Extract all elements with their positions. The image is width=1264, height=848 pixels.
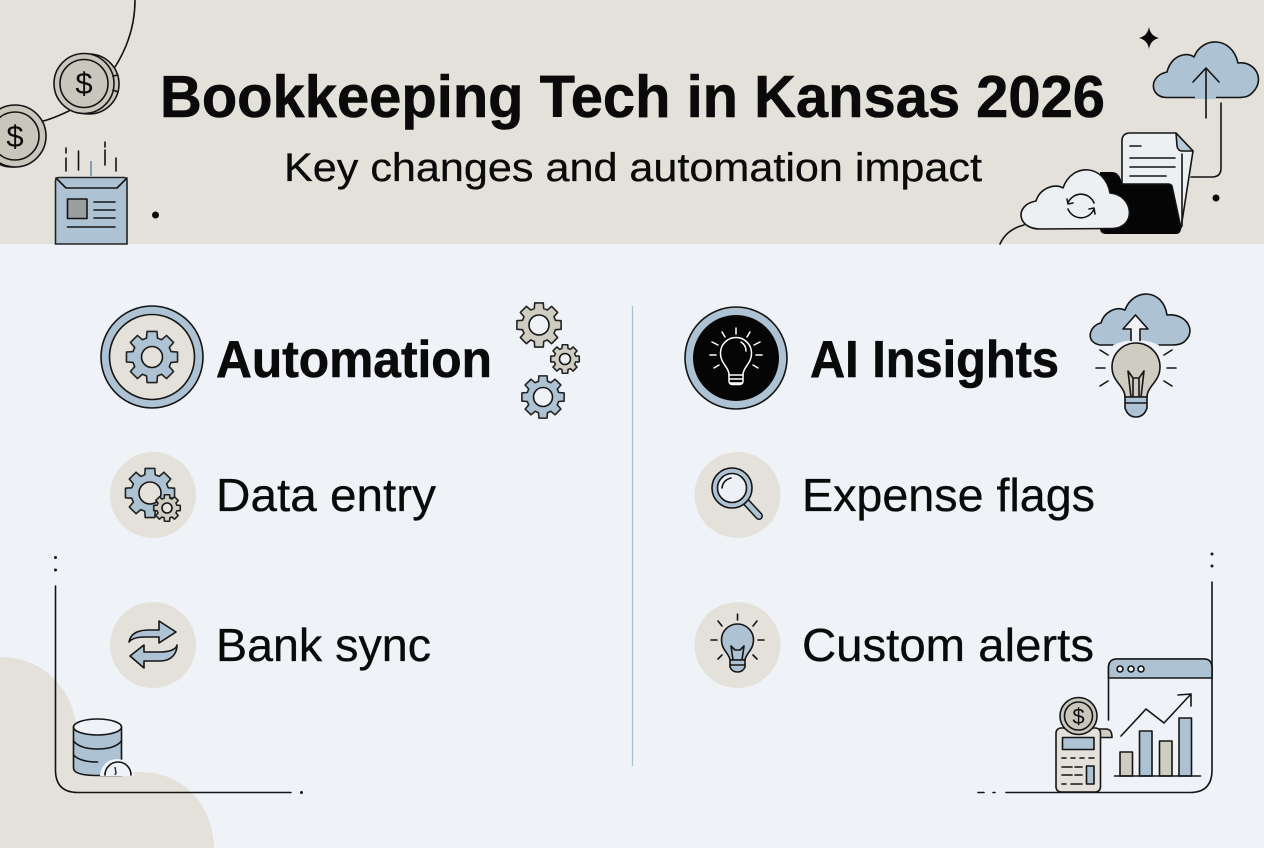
- heading: automation: Automation: [216, 331, 492, 389]
- icon: decorative gears: [517, 303, 579, 418]
- icon: small lightbulb: [694, 602, 780, 688]
- label: data entry: Data entry: [216, 469, 436, 521]
- icon: document envelope: [56, 142, 127, 244]
- icon: upload cloud: [1153, 42, 1258, 177]
- icon: bank sync arrows: [110, 602, 196, 688]
- icon: browser window with bar chart: [1108, 659, 1212, 776]
- dot left: [152, 212, 159, 218]
- icon: automation gear badge: [101, 306, 203, 408]
- bar chart: [1114, 718, 1200, 776]
- label: bank sync: Bank sync: [216, 619, 431, 671]
- dot right: [1212, 194, 1220, 202]
- icon: star: [1139, 27, 1159, 49]
- item: custom alerts: [694, 602, 1094, 688]
- item: expense flags: [694, 452, 1095, 538]
- header band: [0, 0, 1264, 244]
- icon: magnifier: [694, 452, 780, 538]
- icon: coins with connecting line: $: [75, 66, 93, 101]
- panel: ai insights: [685, 294, 1190, 688]
- title: Bookkeeping Tech in Kansas 2026: [160, 64, 1105, 130]
- icon: calculator with coin: $: [1072, 704, 1085, 729]
- icon: database with gauge: [74, 719, 134, 776]
- icon: folder with document: [1100, 133, 1193, 234]
- panel: automation: [101, 303, 579, 688]
- icon: coins with connecting line: $: [6, 119, 24, 154]
- icon: cloud and lightbulb: [1090, 294, 1190, 417]
- subtitle: Key changes and automation impact: [284, 146, 982, 190]
- icon: sync cloud: [1000, 170, 1129, 244]
- icon: calculator with coin: [1056, 698, 1112, 792]
- divider: [632, 306, 634, 766]
- corner bracket left: [54, 556, 303, 794]
- corner bracket right: [978, 552, 1214, 792]
- label: custom alerts: Custom alerts: [802, 619, 1094, 671]
- item: bank sync: [110, 602, 431, 688]
- item: data entry: [110, 452, 436, 538]
- arrow: trend line: [1121, 694, 1191, 736]
- icon: coins with connecting line: [0, 0, 135, 167]
- icon: data entry gears: [110, 452, 196, 538]
- heading: ai insights: AI Insights: [810, 331, 1059, 389]
- label: expense flags: Expense flags: [802, 469, 1095, 521]
- background blob bottom left: [0, 657, 214, 848]
- icon: ai lightbulb badge: [685, 307, 787, 409]
